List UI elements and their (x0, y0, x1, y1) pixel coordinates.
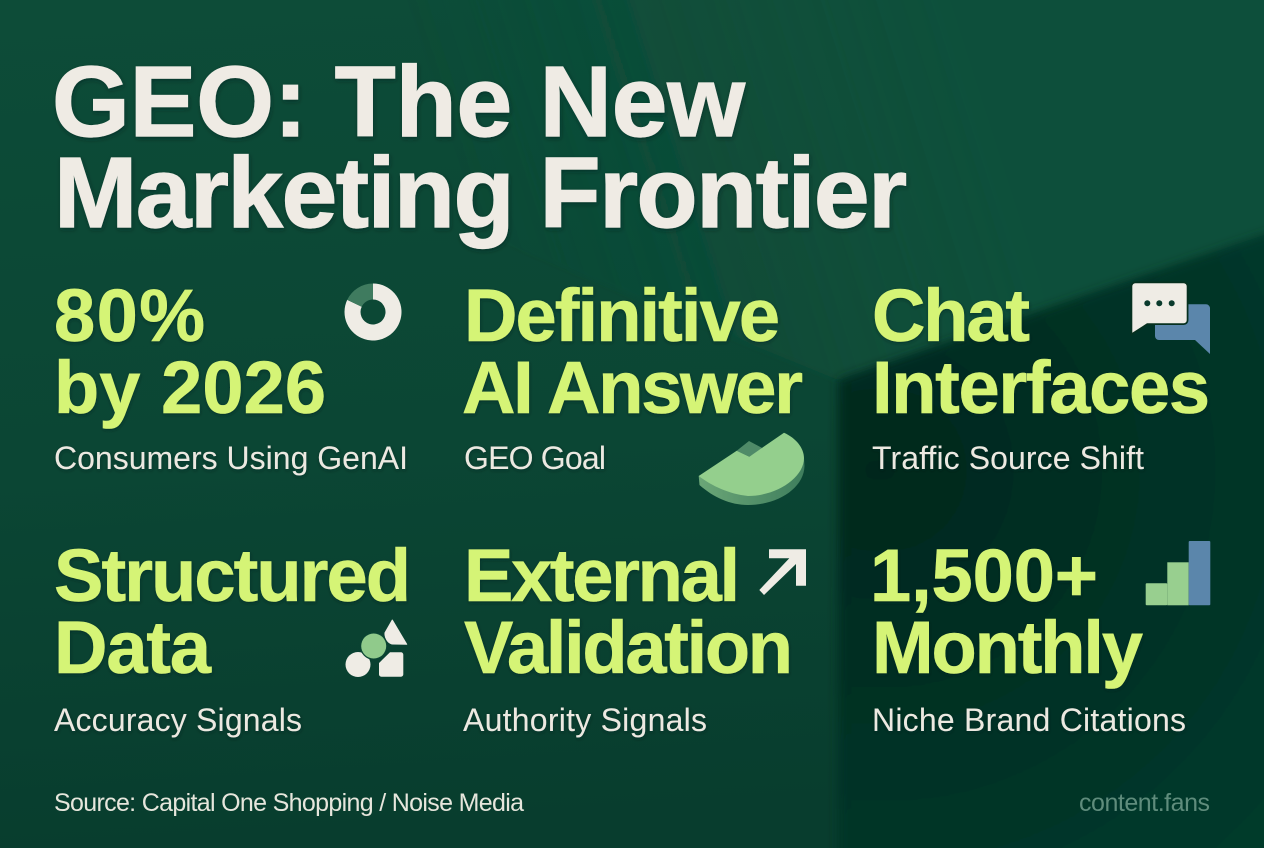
panel: definitive AI answer (462, 274, 804, 505)
icon: donut chart (345, 284, 402, 340)
heading: external validation: Validation (464, 606, 793, 689)
panel: structured data (54, 534, 411, 738)
text: traffic source shift: Traffic Source Shift (872, 440, 1144, 476)
text: accuracy signals: Accuracy Signals (54, 702, 302, 738)
heading: structured data (54, 534, 411, 689)
source note: Source: Capital One Shopping / Noise Media (54, 789, 524, 817)
text: authority signals: Authority Signals (463, 702, 707, 738)
heading: structured data: Structured (54, 534, 411, 617)
heading: 1,500+ monthly: Monthly (872, 606, 1143, 689)
heading: chat interfaces (872, 274, 1210, 429)
text: consumers using GenAI: Consumers Using GenAI (54, 440, 408, 476)
heading: chat interfaces: Chat (872, 274, 1030, 357)
panel: 80% by 2026 (54, 274, 408, 476)
brand credit: content.fans (1079, 789, 1210, 817)
panel: 1,500+ monthly (870, 534, 1210, 738)
title: GEO: The New (52, 46, 745, 158)
text: GEO goal: GEO Goal (464, 440, 606, 476)
heading: definitive AI answer (462, 274, 803, 429)
heading: chat interfaces: Interfaces (872, 346, 1210, 429)
icon: bar chart (1146, 541, 1210, 605)
heading: 80% by 2026 (54, 274, 326, 429)
icon: chat bubbles (1132, 283, 1210, 354)
title (52, 46, 907, 249)
icon: geometric shapes (346, 620, 407, 677)
heading: external validation: External (464, 534, 740, 617)
heading: structured data: Data (54, 606, 212, 689)
panel: external validation (463, 534, 806, 738)
text: niche brand citations: Niche Brand Citations (872, 702, 1186, 738)
panel: chat interfaces (872, 274, 1210, 476)
heading: external validation (464, 534, 793, 689)
icon: arrow up-right (759, 549, 806, 595)
heading: 80% by 2026: 80% (54, 274, 205, 357)
title: Marketing Frontier (54, 137, 907, 249)
heading: definitive AI answer: AI Answer (462, 346, 803, 429)
heading: definitive AI answer: Definitive (464, 274, 780, 357)
heading: 1,500+ monthly: 1,500+ (870, 534, 1098, 617)
heading: 1,500+ monthly (870, 534, 1143, 689)
icon: 3D pie chart (699, 433, 804, 505)
heading: 80% by 2026: by 2026 (54, 346, 326, 429)
